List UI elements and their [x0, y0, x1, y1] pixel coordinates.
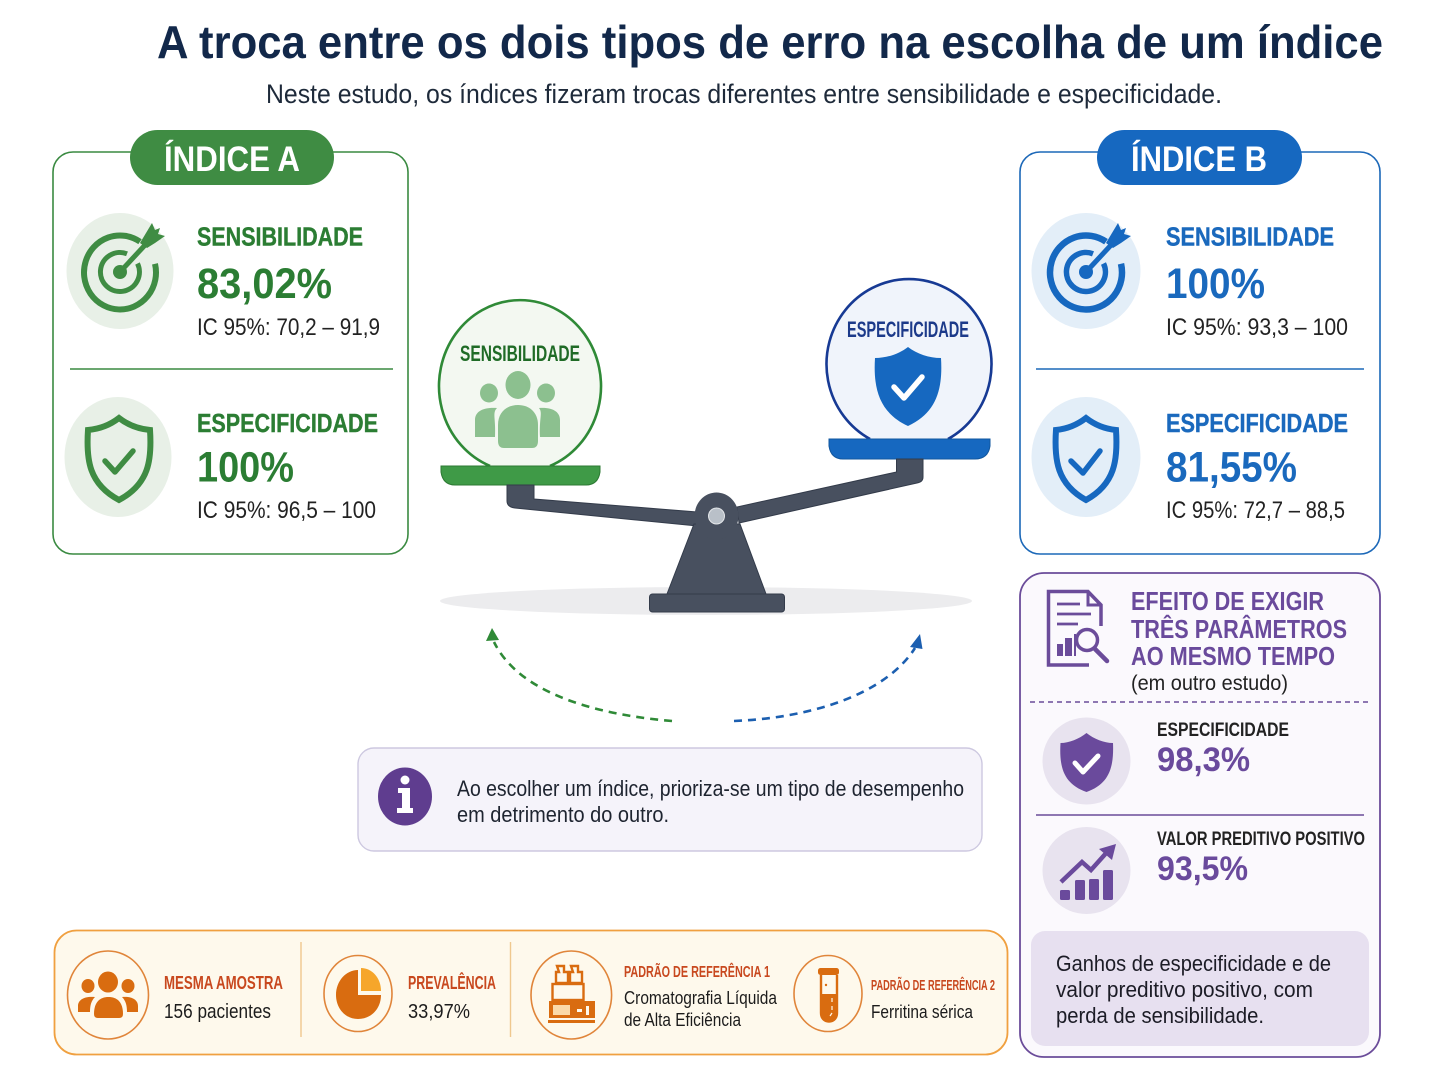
icon: shield A	[64, 397, 172, 517]
especificidade B label: ESPECIFICIDADE	[1166, 408, 1348, 438]
icon: pie chart	[324, 956, 392, 1032]
especificidade B IC: IC 95%: 72,7 – 88,5	[1166, 497, 1345, 524]
metric label: VPP: VALOR PREDITIVO POSITIVO	[1157, 829, 1365, 850]
left sphere: sensibilidade: SENSIBILIDADE	[460, 341, 580, 366]
panel: índice A	[53, 130, 408, 554]
right pan	[829, 439, 990, 459]
mesma amostra text: 156 pacientes	[164, 1001, 271, 1023]
ground shadow	[440, 587, 972, 615]
sensibilidade A label: SENSIBILIDADE	[197, 222, 363, 252]
balance scale	[439, 279, 992, 615]
icon: chromatography machine	[531, 951, 612, 1039]
icon: patients	[68, 951, 148, 1039]
info text: Ao escolher um índice, prioriza-se um tipo de desempenho	[457, 776, 964, 801]
icon: shield B	[1032, 397, 1140, 517]
conclusion box: Ganhos de especificidade e de	[1056, 951, 1331, 976]
icon: document with magnifier	[1048, 592, 1107, 665]
panel heading: TRÊS PARÂMETROS	[1131, 614, 1347, 644]
icon: info	[378, 768, 432, 826]
sensibilidade A value: 83,02%	[197, 260, 332, 308]
mesma amostra text: MESMA AMOSTRA	[164, 973, 283, 993]
callout: info	[358, 748, 982, 851]
prevalência text: 33,97%	[408, 1001, 470, 1023]
fulcrum	[650, 492, 784, 612]
badge: índice B: ÍNDICE B	[1131, 139, 1267, 179]
padrão de referência 1 text: Cromatografia Líquida	[624, 988, 778, 1008]
left pan	[441, 466, 600, 485]
badge: índice A	[130, 130, 334, 185]
panel heading	[1131, 586, 1347, 671]
badge: índice A: ÍNDICE A	[164, 139, 300, 179]
padrão de referência 1 text: PADRÃO DE REFERÊNCIA 1	[624, 961, 770, 981]
conclusion box: perda de sensibilidade.	[1056, 1003, 1264, 1028]
especificidade A IC: IC 95%: 96,5 – 100	[197, 497, 376, 524]
padrão de referência 2 text	[871, 976, 995, 1022]
icon: target	[1032, 213, 1140, 329]
sensibilidade B value: 100%	[1166, 260, 1265, 308]
panel note: (em outro estudo)	[1131, 672, 1288, 695]
conclusion box	[1031, 931, 1369, 1046]
panel heading: EFEITO DE EXIGIR	[1131, 586, 1324, 616]
panel: study info strip	[54, 930, 1008, 1054]
arrow: blue dashed	[734, 634, 922, 721]
icon: target	[66, 213, 174, 329]
panel: efeito de exigir três parâmetros	[1020, 573, 1380, 1057]
padrão de referência 1 text	[624, 961, 778, 1030]
right sphere: especificidade: ESPECIFICIDADE	[847, 317, 969, 342]
prevalência text	[408, 972, 496, 1023]
especificidade A value: 100%	[197, 444, 294, 492]
metric label: especificidade: ESPECIFICIDADE	[1157, 720, 1289, 741]
right sphere: especificidade	[826, 279, 991, 439]
mesma amostra text	[164, 973, 283, 1023]
beam	[507, 459, 923, 526]
metric value: VPP: 93,5%	[1157, 850, 1248, 888]
icon: purple shield	[1042, 718, 1130, 804]
sensibilidade B IC: IC 95%: 93,3 – 100	[1166, 314, 1348, 341]
info text: em detrimento do outro.	[457, 802, 669, 827]
panel heading: AO MESMO TEMPO	[1131, 641, 1335, 671]
icon: test tube	[794, 956, 862, 1032]
left sphere: sensibilidade	[439, 300, 601, 466]
especificidade A label: ESPECIFICIDADE	[197, 408, 378, 438]
title: A troca entre os dois tipos de erro na escolha de um índice	[157, 16, 1383, 68]
badge: índice B	[1097, 130, 1302, 185]
arrow: green dashed	[486, 628, 672, 721]
prevalência text: PREVALÊNCIA	[408, 972, 496, 993]
especificidade B value: 81,55%	[1166, 444, 1297, 492]
padrão de referência 1 text: de Alta Eficiência	[624, 1010, 742, 1030]
panel: índice B	[1020, 130, 1380, 554]
conclusion box: valor preditivo positivo, com	[1056, 977, 1313, 1002]
sensibilidade A IC: IC 95%: 70,2 – 91,9	[197, 314, 380, 341]
padrão de referência 2 text: PADRÃO DE REFERÊNCIA 2	[871, 976, 995, 994]
padrão de referência 2 text: Ferritina sérica	[871, 1002, 974, 1022]
subtitle: Neste estudo, os índices fizeram trocas diferentes entre sensibilidade e especificidade.	[266, 79, 1222, 109]
metric value: especificidade: 98,3%	[1157, 741, 1250, 779]
icon: growth chart	[1042, 827, 1130, 914]
sensibilidade B label: SENSIBILIDADE	[1166, 222, 1334, 252]
